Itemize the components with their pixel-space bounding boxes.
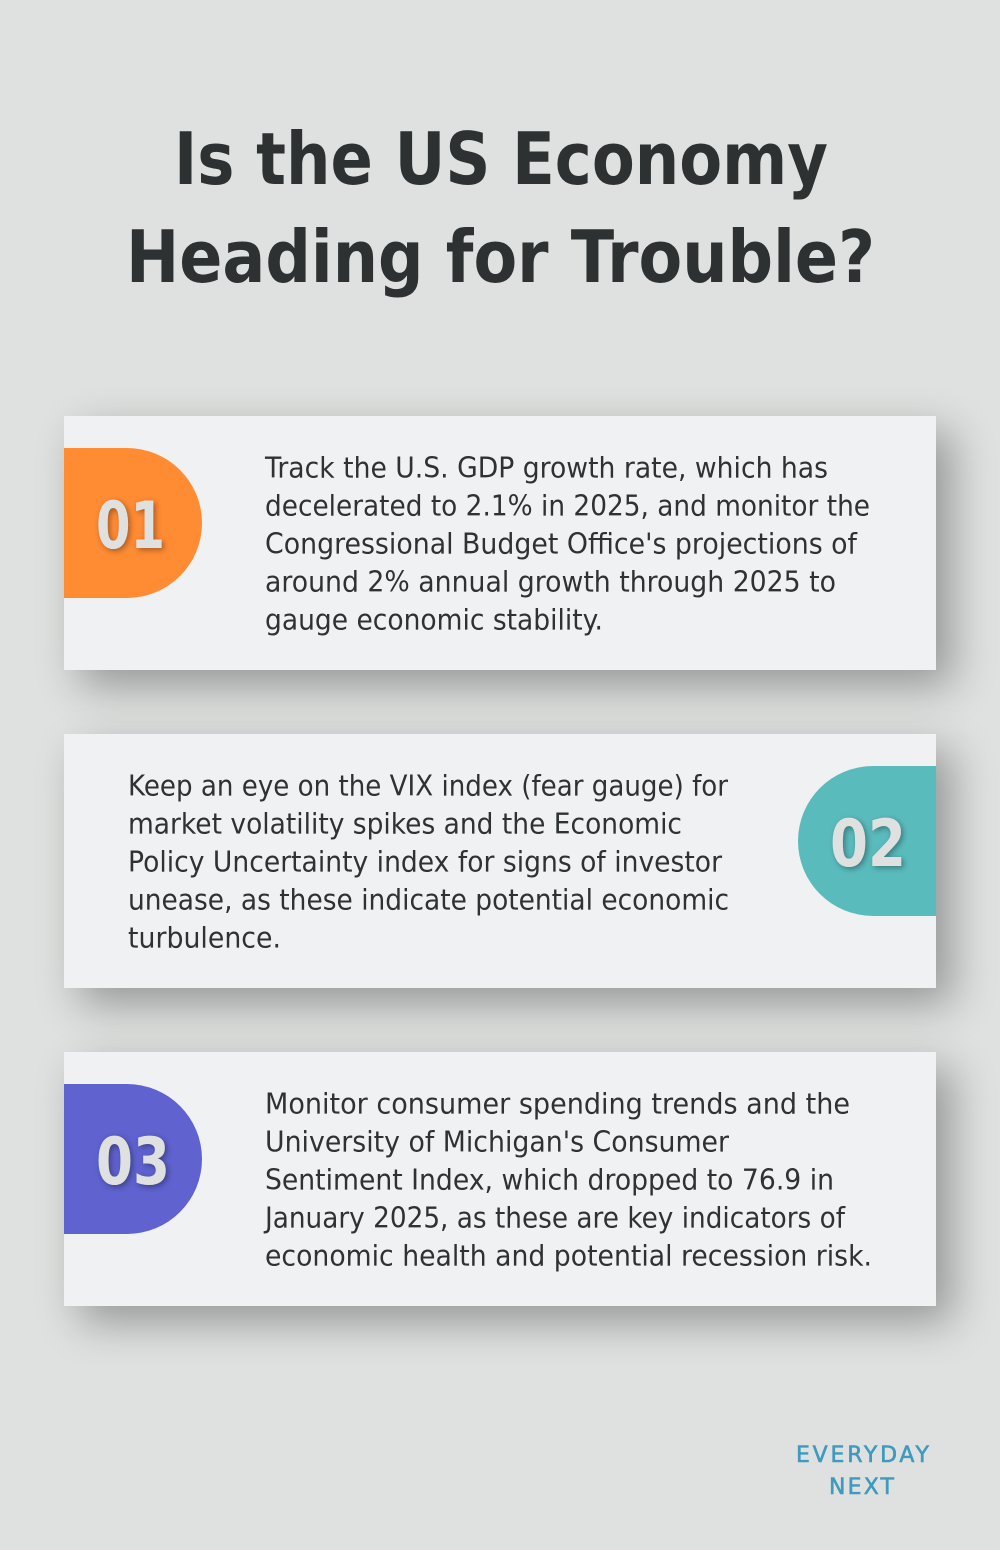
text: step 2: turbulence. bbox=[128, 922, 281, 954]
badge: 03 bbox=[64, 1084, 202, 1234]
text: step 1: decelerated to 2.1% in 2025, and monitor the bbox=[265, 490, 870, 522]
panel: step 1 card bbox=[64, 416, 936, 670]
text: step 3 bbox=[263, 1088, 872, 1272]
number: 01: 01 bbox=[96, 489, 165, 564]
text: step 1: Track the U.S. GDP growth rate, which has bbox=[264, 452, 828, 484]
title bbox=[126, 117, 875, 299]
text: step 2 bbox=[128, 770, 729, 954]
text: step 1: around 2% annual growth through 2025 to bbox=[265, 566, 836, 598]
text: step 3: University of Michigan's Consumer bbox=[265, 1126, 729, 1158]
text: step 1: gauge economic stability. bbox=[265, 604, 603, 636]
badge: 01 bbox=[64, 448, 202, 598]
title: Is the US Economy bbox=[174, 117, 828, 201]
text: step 2: unease, as these indicate potential economic bbox=[128, 884, 729, 916]
logo: Everyday Next: NEXT bbox=[829, 1475, 895, 1500]
logo: Everyday Next: EVERYDAY bbox=[796, 1443, 930, 1468]
title: Heading for Trouble? bbox=[126, 215, 875, 299]
text: step 2: Keep an eye on the VIX index (fear gauge) for bbox=[128, 770, 728, 802]
number: 03: 03 bbox=[96, 1125, 170, 1200]
text: step 1 bbox=[264, 452, 870, 636]
text: step 3: economic health and potential recession risk. bbox=[265, 1240, 872, 1272]
panel: step 3 card bbox=[64, 1052, 936, 1306]
text: step 2: market volatility spikes and the Economic bbox=[128, 808, 682, 840]
text: step 1: Congressional Budget Office's projections of bbox=[265, 528, 858, 560]
text: step 3: Sentiment Index, which dropped to 76.9 in bbox=[265, 1164, 834, 1196]
text: step 2: Policy Uncertainty index for signs of investor bbox=[128, 846, 722, 878]
text: step 3: January 2025, as these are key indicators of bbox=[263, 1202, 846, 1234]
text: step 3: Monitor consumer spending trends and the bbox=[265, 1088, 850, 1120]
panel: step 2 card bbox=[64, 734, 936, 988]
badge: 02 bbox=[798, 766, 936, 916]
number: 02: 02 bbox=[830, 807, 906, 882]
